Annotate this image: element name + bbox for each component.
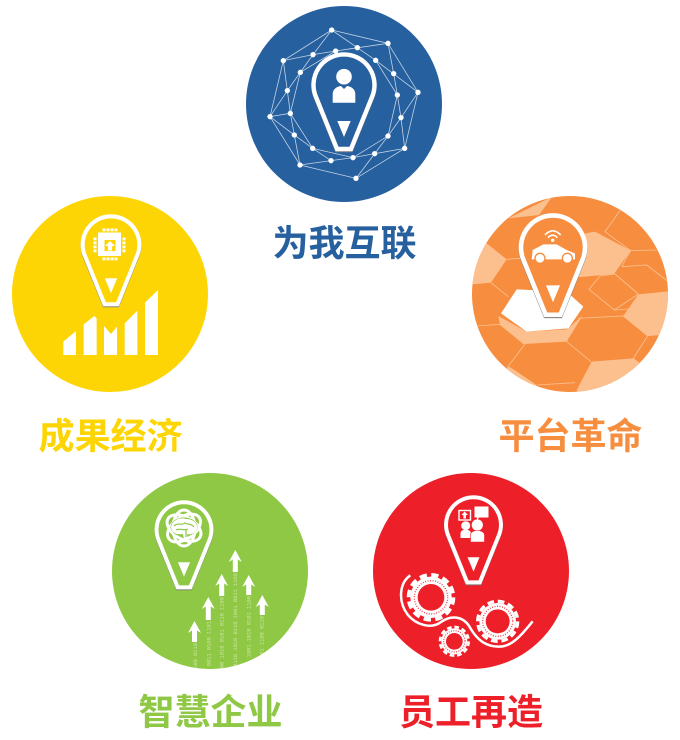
bar chart xyxy=(63,290,158,355)
icon: person xyxy=(333,69,355,103)
panel: 智慧企业 xyxy=(112,473,308,732)
map pin xyxy=(83,216,139,305)
panel: 成果经济 xyxy=(12,196,208,456)
label: 成果经济 xyxy=(38,416,183,456)
binary code columns: 0110 0011 1100 1010 0101 0110 1100 xyxy=(220,597,226,707)
gears and curve xyxy=(401,575,533,656)
label: 智慧企业 xyxy=(138,692,283,732)
panel: 员工再造 xyxy=(373,473,569,732)
map pin xyxy=(446,497,501,583)
label: 为我互联 xyxy=(272,222,417,264)
map pin xyxy=(314,54,374,150)
binary code columns: 0110 0011 1100 0110 xyxy=(193,643,199,704)
network mesh xyxy=(267,27,421,181)
orange circle xyxy=(472,196,668,392)
binary code columns: 0110 0011 0110 1010 0110 1001 0011 1100 xyxy=(233,573,239,699)
map pin xyxy=(157,502,211,588)
hexagon pattern xyxy=(465,197,675,397)
binary code columns xyxy=(194,573,264,668)
label: 员工再造 xyxy=(399,692,543,732)
map pin xyxy=(521,215,585,316)
panel: 平台革命 xyxy=(465,196,675,456)
panel: 为我互联 xyxy=(246,6,442,264)
growth arrows xyxy=(188,550,269,642)
blue circle xyxy=(246,6,442,202)
label: 平台革命 xyxy=(498,416,643,456)
icon: connected car xyxy=(532,231,575,263)
icon: people talking xyxy=(459,506,488,542)
binary code columns: 0110 1100 0011 1001 1100 0110 xyxy=(260,616,266,710)
green circle xyxy=(112,473,308,669)
binary code columns: 0110 1100 0011 0100 1101 xyxy=(206,621,212,699)
yellow circle xyxy=(12,196,208,392)
red circle xyxy=(373,473,569,669)
binary code columns: 0110 1100 0011 1001 1010 0101 1100 xyxy=(246,596,252,706)
icon: brain xyxy=(162,508,206,548)
white hexagon xyxy=(501,289,583,332)
icon: chip xyxy=(94,228,126,260)
